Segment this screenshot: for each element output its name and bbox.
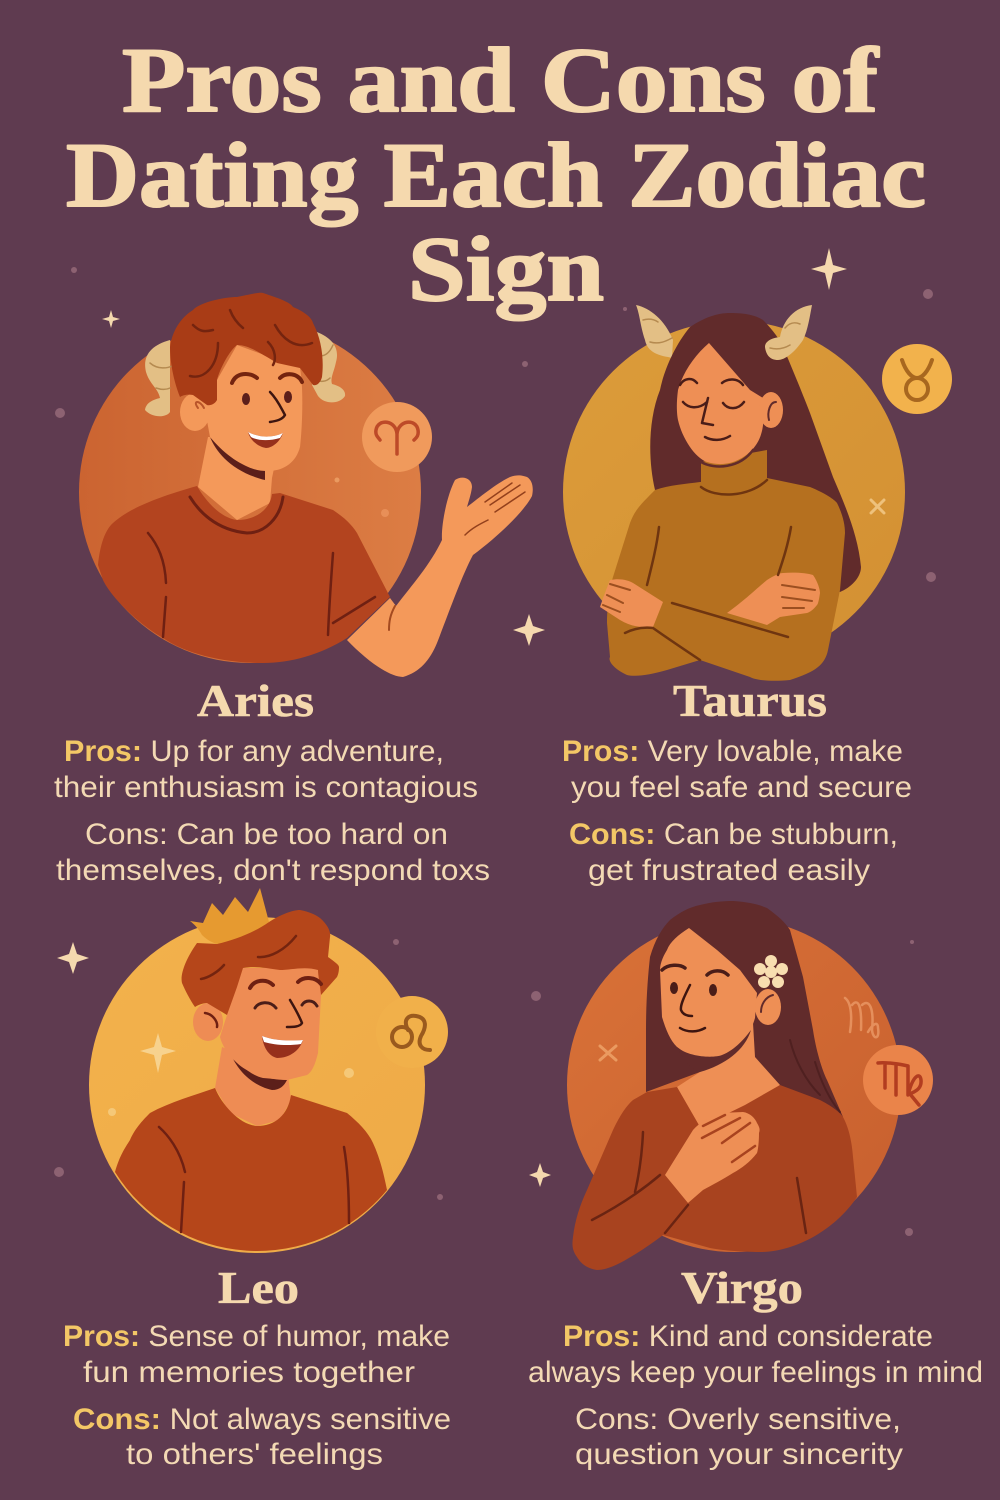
Aries text: themselves, don't respond toxs — [56, 854, 490, 887]
Virgo text: Pros: Kind and considerate — [563, 1320, 933, 1353]
Leo text — [63, 1320, 451, 1471]
panel: Virgo — [567, 901, 933, 1270]
Leo text: Cons: Not always sensitive — [73, 1403, 451, 1436]
Virgo text — [528, 1320, 983, 1471]
Aries circle — [79, 321, 421, 663]
Aries heading: Aries — [197, 675, 314, 726]
Taurus circle — [563, 321, 905, 663]
icon: Aries symbol — [362, 402, 432, 472]
Aries figure — [98, 293, 533, 677]
Leo figure — [108, 888, 387, 1251]
Aries text — [54, 735, 490, 887]
Leo circle — [89, 917, 425, 1253]
flower — [754, 955, 788, 988]
Virgo text: question your sincerity — [575, 1438, 903, 1471]
icon: Virgo symbol — [863, 1045, 933, 1115]
Leo text: Pros: Sense of humor, make — [63, 1320, 450, 1353]
Leo text: to others' feelings — [126, 1438, 383, 1471]
sparkles and dots — [54, 248, 936, 1236]
Taurus heading: Taurus — [673, 675, 827, 726]
Taurus text: Cons: Can be stubburn, — [569, 818, 898, 851]
Aries text: their enthusiasm is contagious — [54, 771, 478, 804]
Taurus figure — [600, 305, 884, 681]
title: Pros and Cons of — [122, 29, 880, 131]
Virgo heading: Virgo — [681, 1262, 803, 1313]
Aries text: Pros: Up for any adventure, — [64, 735, 444, 768]
panel: Taurus — [563, 305, 952, 681]
icon: Taurus symbol — [882, 344, 952, 414]
Taurus text: you feel safe and secure — [571, 771, 912, 804]
Virgo circle — [567, 918, 901, 1252]
Virgo text: Cons: Overly sensitive, — [575, 1403, 901, 1436]
icon: Leo symbol — [376, 996, 448, 1068]
title — [66, 29, 926, 320]
Taurus text: Pros: Very lovable, make — [562, 735, 903, 768]
panel: Aries — [79, 293, 533, 677]
Leo heading: Leo — [218, 1262, 299, 1313]
Leo text: fun memories together — [83, 1356, 415, 1389]
Virgo figure — [572, 901, 878, 1270]
Aries text: Cons: Can be too hard on — [85, 818, 448, 851]
Taurus text — [562, 735, 912, 887]
Taurus text: get frustrated easily — [588, 854, 870, 887]
panel: Leo — [89, 888, 448, 1253]
title: Sign — [408, 218, 604, 320]
title: Dating Each Zodiac — [66, 124, 926, 226]
Virgo text: always keep your feelings in mind — [528, 1356, 983, 1389]
